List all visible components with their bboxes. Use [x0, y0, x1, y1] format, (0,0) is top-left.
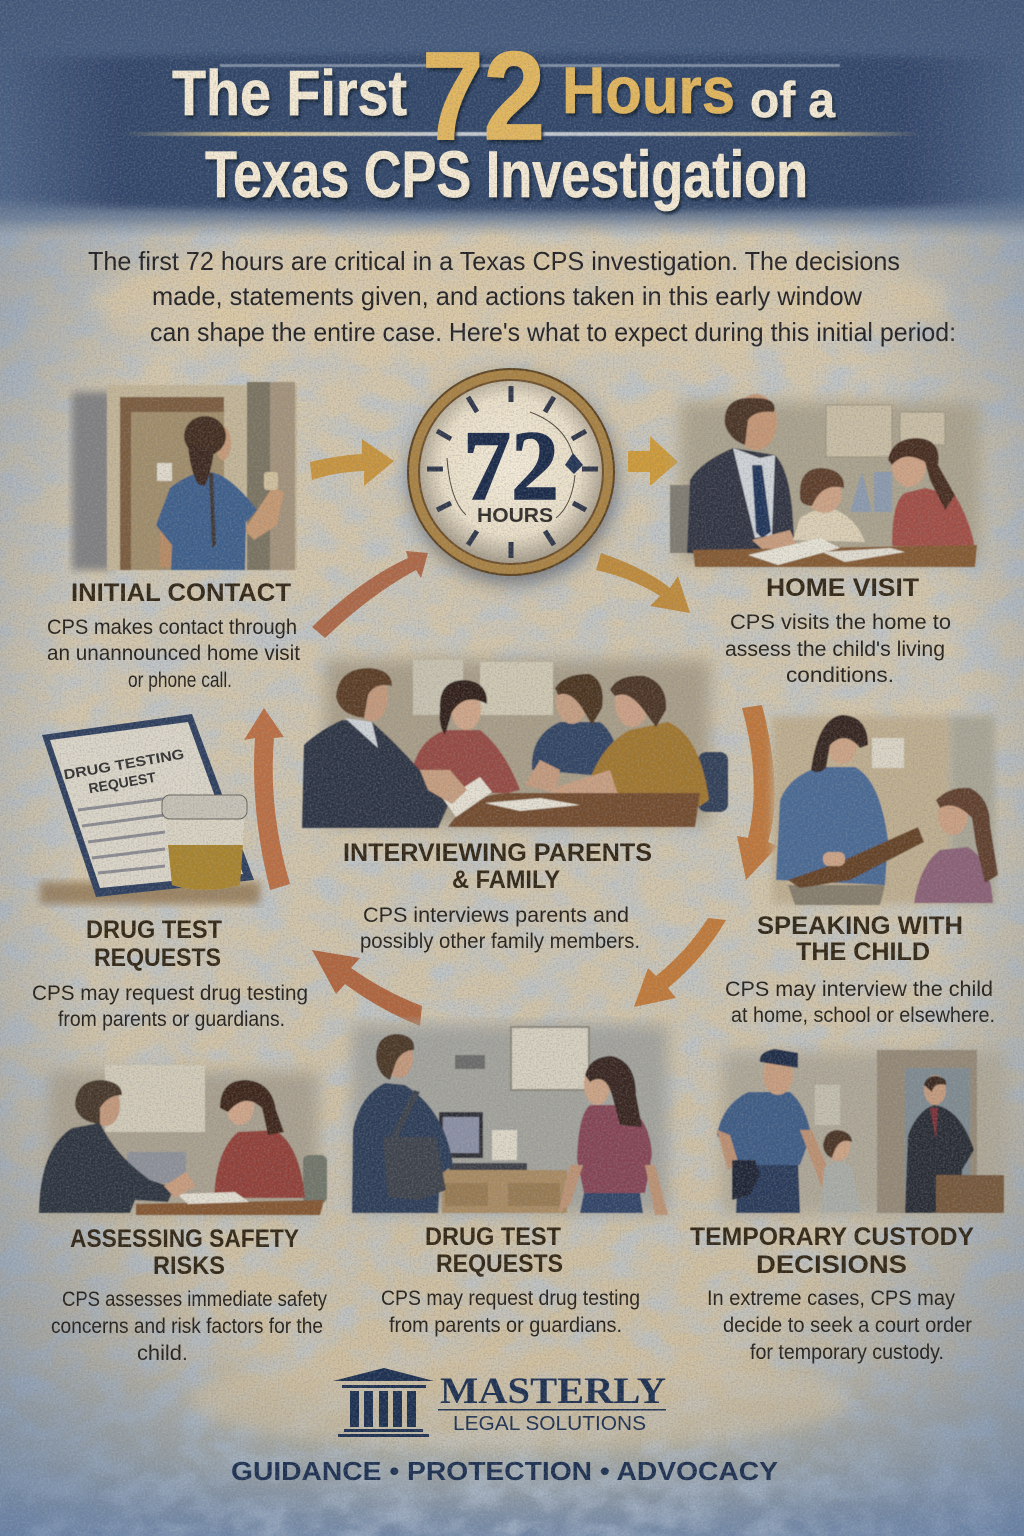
arrow: lower right — [634, 918, 726, 1007]
illustration: office visit — [352, 1025, 668, 1215]
heading — [757, 912, 963, 966]
man in suit — [302, 720, 448, 828]
man in mustard jacket — [586, 722, 709, 806]
description: conditions. — [786, 664, 894, 687]
woman — [580, 1193, 643, 1213]
intro paragraph — [88, 246, 956, 347]
woman — [892, 488, 975, 548]
heading: SPEAKING WITH — [757, 912, 963, 940]
title line one: 72 — [422, 27, 545, 166]
description: CPS assesses immediate safety — [62, 1288, 327, 1311]
title line one: Hours — [562, 53, 735, 127]
title line one: of a — [750, 72, 836, 128]
heading: & FAMILY — [452, 866, 560, 894]
clock label: HOURS — [477, 505, 553, 527]
illustration: visit at table — [670, 394, 980, 567]
heading: TEMPORARY CUSTODY — [690, 1223, 974, 1251]
description: or phone call. — [128, 669, 232, 692]
form title: REQUEST — [87, 769, 157, 796]
description: concerns and risk factors for the — [51, 1315, 323, 1338]
monitor and keyboard — [439, 1112, 483, 1158]
heading: THE CHILD — [796, 938, 930, 966]
logo: Masterly Legal Solutions — [333, 1368, 666, 1437]
arrow: clock to home visit — [628, 436, 678, 486]
title banner — [0, 27, 1024, 212]
table — [448, 793, 700, 827]
description: an unannounced home visit — [47, 642, 300, 665]
description: from parents or guardians. — [58, 1008, 285, 1031]
description: decide to seek a court order — [723, 1314, 972, 1337]
panel: temporary custody decisions — [690, 1049, 1007, 1364]
arrow: up to clock — [312, 551, 428, 638]
description: CPS may request drug testing — [32, 982, 308, 1005]
child — [821, 1162, 861, 1212]
description: CPS may interview the child — [725, 978, 993, 1001]
panel: drug test requests (left) — [32, 714, 308, 1031]
panel: assessing safety risks — [39, 1065, 327, 1365]
heading — [343, 839, 652, 894]
center clock: 72 hours — [408, 369, 614, 575]
description: In extreme cases, CPS may — [707, 1287, 955, 1310]
heading: REQUESTS — [94, 944, 221, 972]
heading: RISKS — [153, 1252, 225, 1280]
form title: DRUG TESTING — [62, 745, 185, 782]
top rule — [220, 64, 840, 67]
description: at home, school or elsewhere. — [731, 1004, 995, 1027]
subtitle: LEGAL SOLUTIONS — [453, 1413, 646, 1435]
chair — [698, 752, 728, 812]
intro paragraph: The first 72 hours are critical in a Texas CPS investigation. The decisions — [88, 246, 900, 276]
heading: INTERVIEWING PARENTS — [343, 839, 652, 867]
panel: home visit — [670, 394, 980, 687]
table — [136, 1200, 324, 1215]
arrow: up left side — [244, 708, 290, 890]
description: CPS interviews parents and — [363, 904, 629, 927]
tagline: GUIDANCE • PROTECTION • ADVOCACY — [231, 1456, 778, 1486]
arrow: contact to clock — [310, 439, 394, 486]
panel: drug test requests (center) — [352, 1025, 668, 1337]
book — [788, 827, 924, 888]
description: CPS visits the home to — [730, 611, 951, 634]
illustration: worker and child — [772, 715, 998, 905]
description: assess the child's living — [725, 638, 945, 661]
woman — [776, 767, 888, 885]
description — [381, 1287, 640, 1337]
description — [707, 1287, 972, 1364]
description — [32, 982, 308, 1031]
heading: DRUG TEST — [425, 1223, 561, 1251]
description — [47, 616, 300, 692]
icon: courthouse columns — [333, 1368, 434, 1437]
description: CPS may request drug testing — [381, 1287, 640, 1310]
description: from parents or guardians. — [389, 1314, 622, 1337]
heading — [690, 1223, 974, 1279]
officer — [736, 1160, 800, 1213]
clock marker — [565, 453, 583, 474]
panel: interviewing parents and family — [302, 660, 728, 953]
illustration: caseworker with parent — [39, 1065, 327, 1215]
description: CPS makes contact through — [47, 616, 297, 639]
heading: HOME VISIT — [766, 574, 919, 602]
mid rule — [122, 132, 922, 136]
man in polo — [532, 722, 620, 775]
description — [360, 904, 640, 953]
man in suit — [39, 1123, 174, 1213]
description: for temporary custody. — [750, 1341, 944, 1364]
heading: DRUG TEST — [86, 916, 222, 944]
papers — [444, 777, 492, 817]
description — [725, 978, 995, 1027]
heading: DECISIONS — [756, 1251, 907, 1279]
description — [51, 1288, 327, 1365]
description — [725, 611, 951, 687]
title line one — [172, 27, 836, 166]
desk — [936, 1175, 1004, 1213]
man with bag — [352, 1083, 453, 1213]
intro paragraph: can shape the entire case. Here's what to expect during this initial period: — [150, 317, 956, 347]
arrow: down right side — [737, 705, 778, 880]
intro paragraph: made, statements given, and actions taken in this early window — [152, 281, 862, 311]
title line two: Texas CPS Investigation — [205, 137, 808, 211]
heading — [86, 916, 222, 972]
heading — [425, 1223, 563, 1278]
woman — [214, 1130, 305, 1198]
illustration: family meeting — [302, 660, 728, 828]
panel: speaking with the child — [725, 715, 998, 1027]
panel: initial contact — [47, 382, 300, 692]
girl — [914, 847, 993, 903]
heading: INITIAL CONTACT — [71, 579, 291, 607]
heading: ASSESSING SAFETY — [70, 1225, 299, 1253]
arrow: lower left — [312, 950, 422, 1026]
man in doorway — [905, 1105, 974, 1213]
desk — [442, 1170, 567, 1213]
heading — [70, 1225, 299, 1280]
illustration: worker at door — [72, 382, 297, 570]
form title — [62, 745, 189, 800]
clock ticks — [427, 386, 598, 558]
description: possibly other family members. — [360, 930, 640, 953]
wall frames — [826, 405, 892, 457]
wordmark: MASTERLY — [440, 1371, 666, 1412]
clock number: 72 — [463, 410, 559, 521]
man in suit — [687, 448, 795, 556]
heading: REQUESTS — [436, 1250, 563, 1278]
description: child. — [137, 1342, 188, 1365]
table and papers — [693, 545, 977, 567]
child — [793, 508, 865, 542]
woman — [411, 730, 520, 793]
arrow: clock to home visit panel — [596, 553, 690, 613]
illustration: clipboard and sample cup — [40, 714, 260, 904]
illustration: officer, child and attorney — [717, 1049, 1007, 1214]
title line one: The First — [172, 57, 407, 129]
